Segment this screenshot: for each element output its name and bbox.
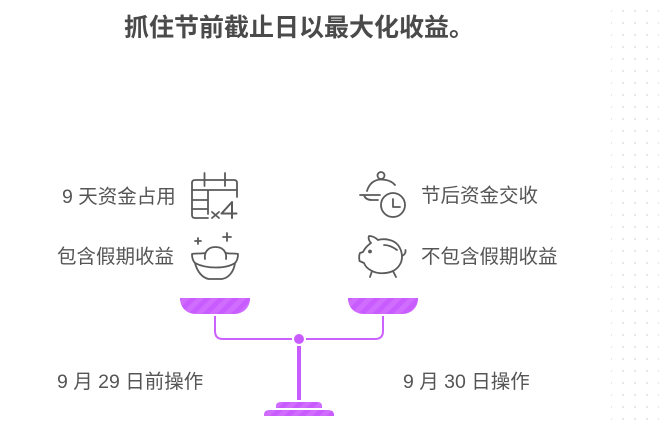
stem (297, 346, 301, 400)
right arm (306, 316, 383, 339)
right pan (348, 298, 418, 314)
balance scale (180, 298, 418, 416)
icon: piggy bank (359, 236, 406, 277)
label: operate on Sept 30: 9 月 30 日操作 (403, 371, 530, 393)
title: 抓住节前截止日以最大化收益。 (124, 14, 474, 42)
base lower (264, 410, 334, 416)
left pan (180, 298, 250, 314)
icon: covered dish with clock (360, 172, 405, 217)
icon: calendar x4 (192, 173, 237, 218)
pivot (294, 334, 304, 344)
icon: gold ingot with sparkles (192, 233, 238, 279)
label: 9 days of funds tied up: 9 天资金占用 (62, 186, 176, 208)
label: operate before Sept 29: 9 月 29 日前操作 (57, 371, 203, 393)
base upper (276, 402, 322, 408)
label: includes holiday earnings: 包含假期收益 (57, 246, 174, 268)
label: funds delivered after holiday: 节后资金交收 (421, 185, 538, 207)
label: excludes holiday earnings: 不包含假期收益 (421, 246, 558, 268)
left arm (215, 316, 292, 339)
